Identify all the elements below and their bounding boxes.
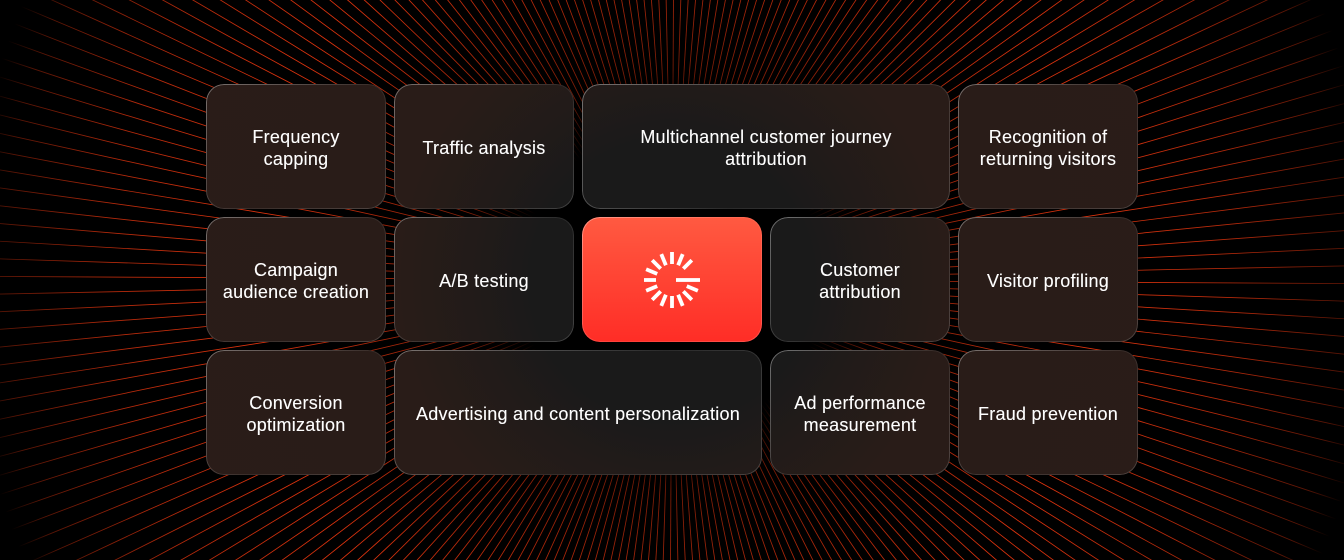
card: Recognition of returning visitors: Recognition of (989, 126, 1107, 146)
card: Recognition of returning visitors (958, 84, 1138, 209)
card: Multichannel customer journey attribution: attribution (725, 148, 807, 168)
card: Campaign audience creation: audience creation (223, 282, 369, 302)
card: Campaign audience creation: Campaign (254, 260, 338, 280)
card: Ad performance measurement: Ad performance (794, 392, 926, 412)
card: Visitor profiling (958, 217, 1138, 342)
card: Conversion optimization: optimization (246, 414, 346, 434)
card: Ad performance measurement: measurement (804, 414, 916, 434)
card: central logo tile (582, 217, 762, 342)
card: Frequency capping: capping (264, 148, 328, 168)
icon: radial tick logo (644, 252, 700, 308)
card: Campaign audience creation (206, 217, 386, 342)
card: Traffic analysis (394, 84, 574, 209)
card: Multichannel customer journey attribution: Multichannel customer journey (640, 126, 892, 146)
card: Fraud prevention (958, 350, 1138, 475)
card: Customer attribution (770, 217, 950, 342)
card: Visitor profiling: Visitor profiling (987, 270, 1109, 290)
card: Conversion optimization: Conversion (249, 392, 343, 412)
card: Conversion optimization (206, 350, 386, 475)
card: Frequency capping (206, 84, 386, 209)
card: Advertising and content personalization (394, 350, 762, 475)
card: Frequency capping: Frequency (252, 126, 340, 146)
card: Multichannel customer journey attribution (582, 84, 950, 209)
card: Fraud prevention: Fraud prevention (978, 404, 1118, 424)
card: Advertising and content personalization: Advertising and content personalization (416, 404, 740, 424)
card: A/B testing (394, 217, 574, 342)
card: Customer attribution: attribution (819, 282, 901, 302)
card: A/B testing: A/B testing (439, 270, 529, 290)
card: Traffic analysis: Traffic analysis (422, 138, 546, 158)
card: Customer attribution: Customer (820, 260, 900, 280)
card: Ad performance measurement (770, 350, 950, 475)
card: Recognition of returning visitors: returning visitors (980, 148, 1116, 168)
